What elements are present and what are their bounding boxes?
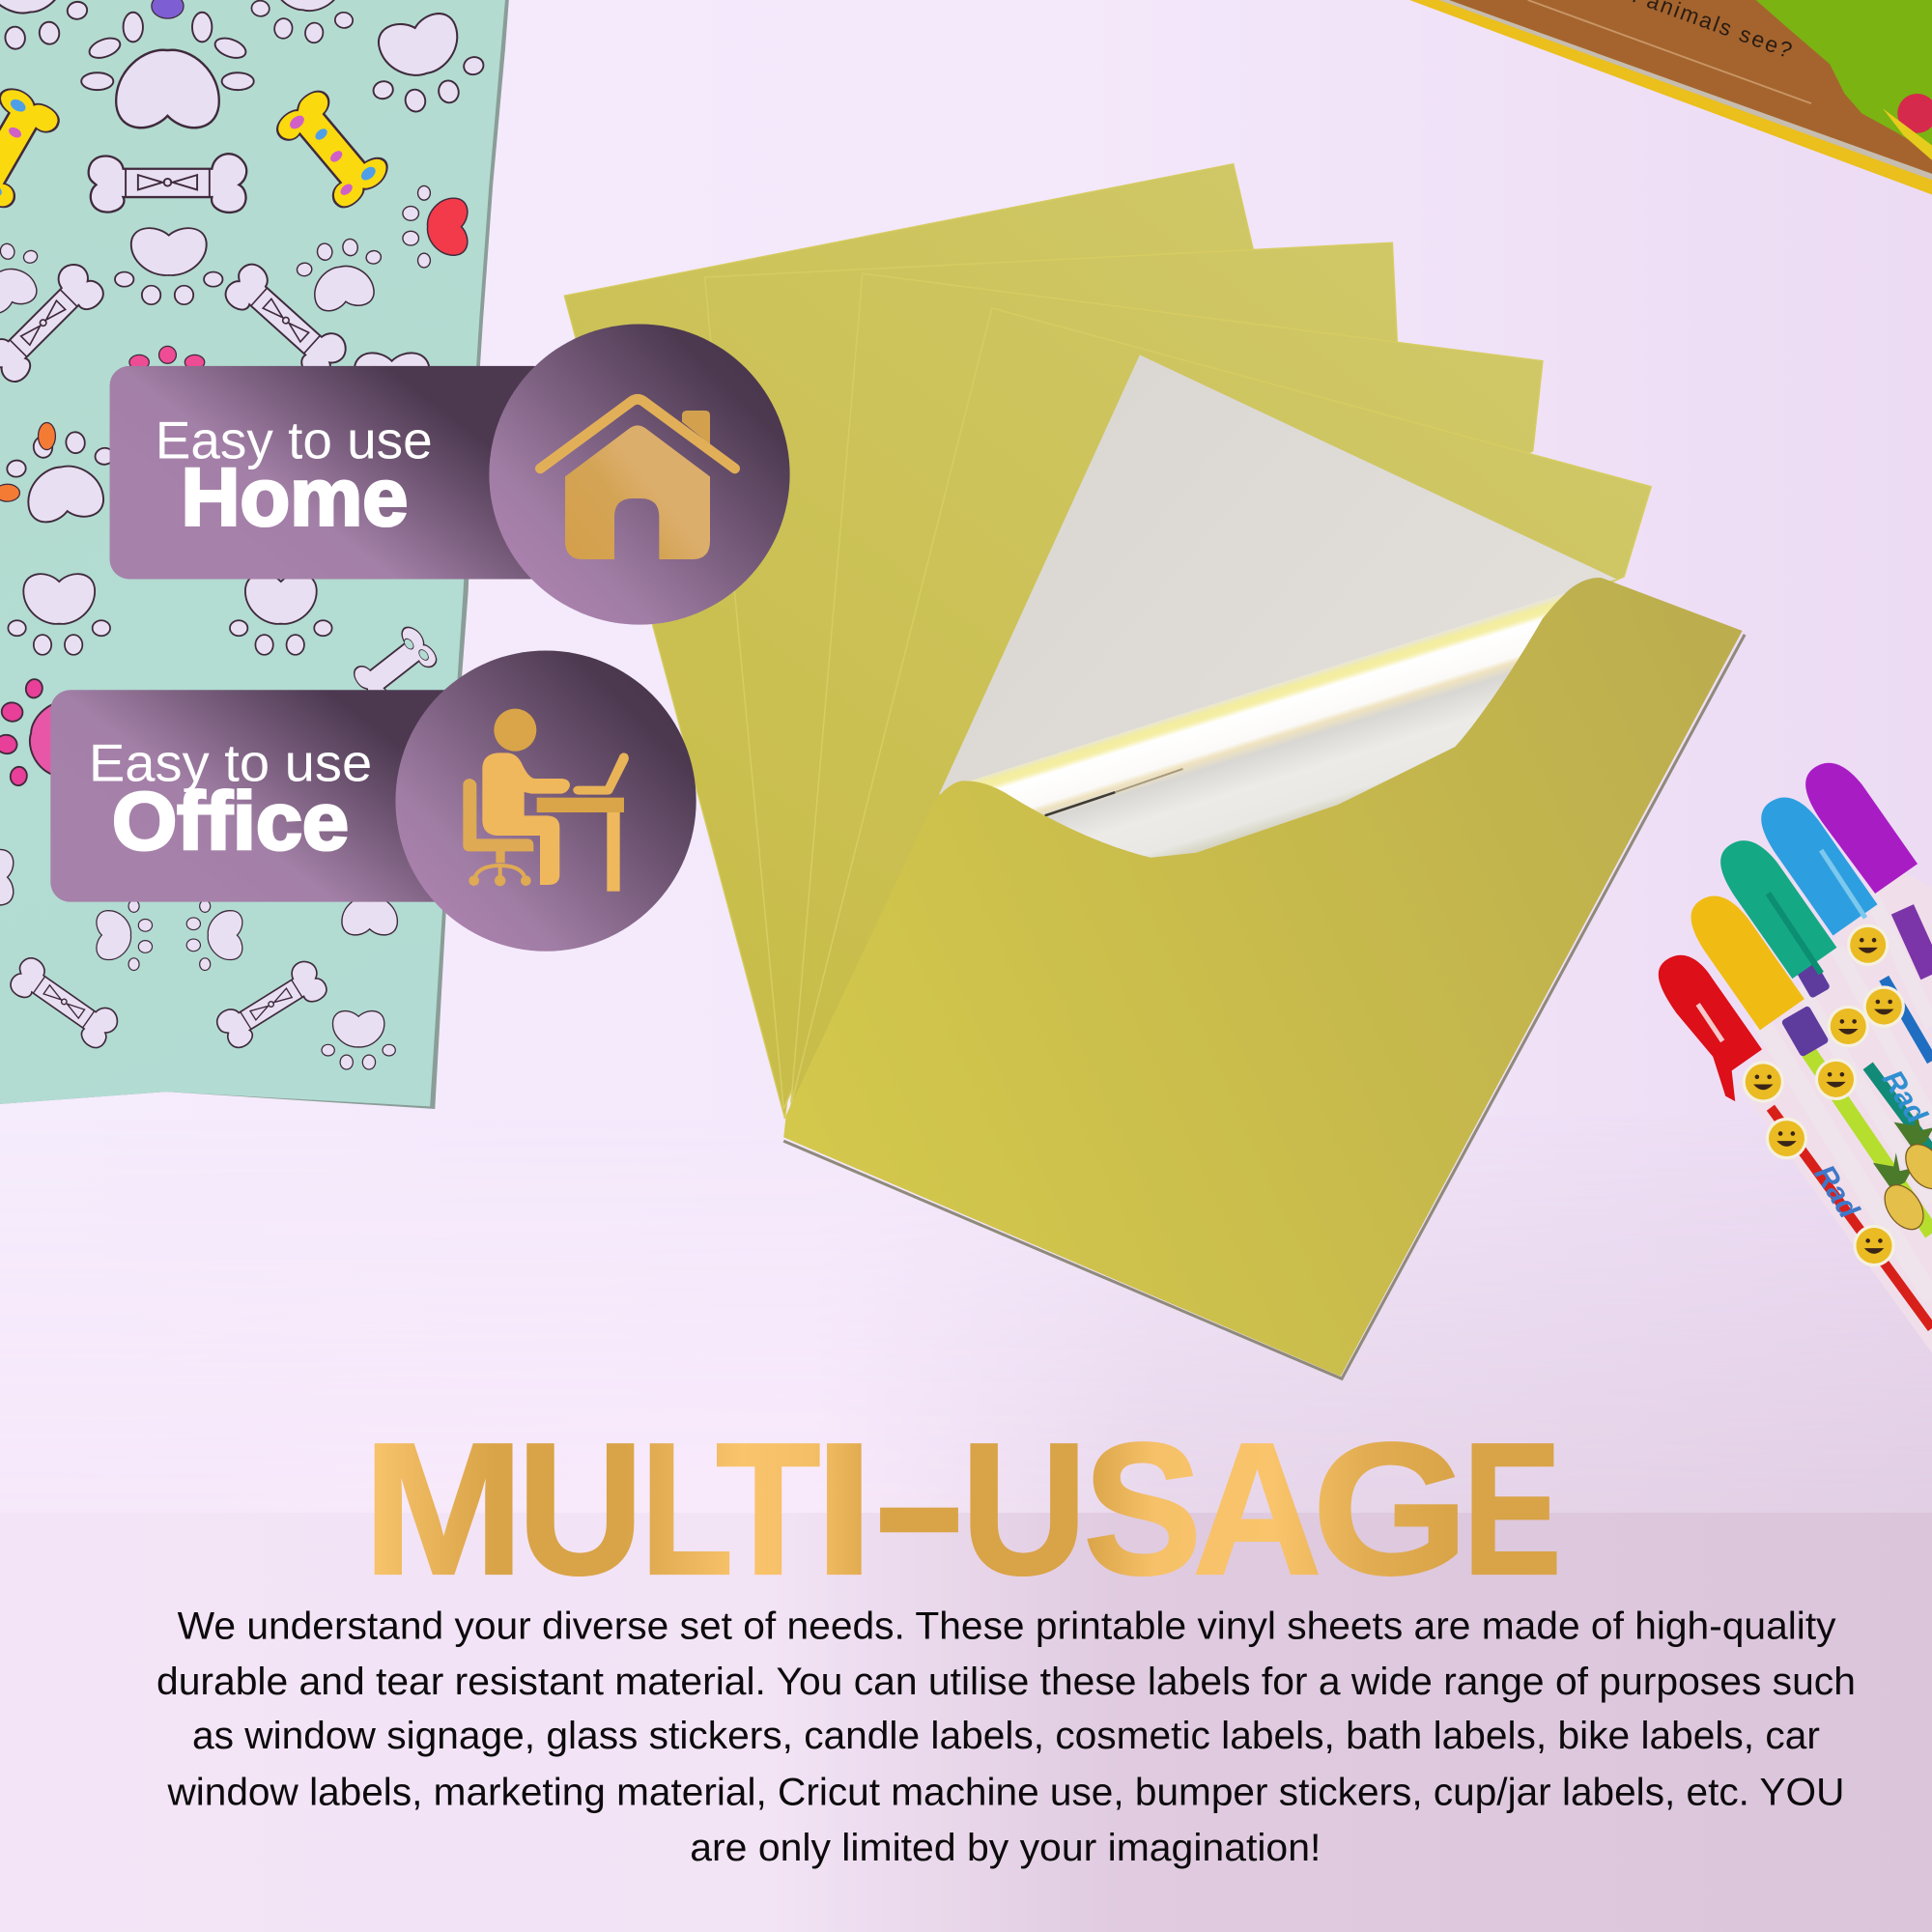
title: G xyxy=(1312,1405,1468,1614)
title: M xyxy=(363,1405,525,1614)
title: I xyxy=(813,1405,874,1614)
label: home: Home xyxy=(181,451,408,542)
ink stripes xyxy=(1771,909,1932,1328)
back sheets xyxy=(564,164,1651,1119)
top yellow sheet xyxy=(783,578,1743,1377)
label: easy to use: Easy to use xyxy=(156,410,433,469)
description paragraph: as window signage, glass stickers, candle labels, cosmetic labels, bath labels, bike labels, car xyxy=(192,1715,1820,1757)
badge panel xyxy=(110,366,554,579)
clear pen tubes xyxy=(1737,863,1932,1353)
description paragraph: durable and tear resistant material. You can utilise these labels for a wide range of purposes such xyxy=(156,1661,1856,1703)
icon: house xyxy=(540,399,735,559)
shadow edge xyxy=(783,635,1745,1378)
badge panel xyxy=(50,690,469,902)
title: S xyxy=(1084,1405,1202,1614)
title xyxy=(363,1400,1561,1614)
title: - xyxy=(870,1400,968,1609)
white pen barrels xyxy=(1761,894,1932,1298)
description paragraph: are only limited by your imagination! xyxy=(690,1827,1321,1869)
background surface xyxy=(790,48,1932,1932)
badge: easy to use home xyxy=(110,324,790,625)
peeled white backing xyxy=(939,355,1616,795)
pen caps xyxy=(1642,751,1918,1104)
gel pens xyxy=(1642,751,1932,1353)
icon: person at desk xyxy=(463,709,629,892)
title: E xyxy=(1463,1405,1561,1614)
title: U xyxy=(961,1405,1087,1614)
title: U xyxy=(518,1405,643,1614)
vinyl sheets fan xyxy=(564,164,1745,1378)
badge circle xyxy=(395,650,696,952)
title: T xyxy=(716,1405,820,1614)
glossy curl xyxy=(969,593,1566,858)
label: office: Office xyxy=(112,776,349,867)
description paragraph xyxy=(156,1605,1856,1869)
badge: easy to use office xyxy=(50,650,696,952)
badge circle xyxy=(489,324,790,625)
label: easy to use: Easy to use xyxy=(89,733,372,793)
description paragraph: We understand your diverse set of needs. These printable vinyl sheets are made of high-quality xyxy=(178,1605,1836,1647)
emoji and decorations xyxy=(1743,924,1932,1266)
title: L xyxy=(640,1405,733,1614)
title: A xyxy=(1193,1405,1321,1614)
emoji and decorations: Rad xyxy=(1876,1065,1932,1130)
emoji and decorations: Rad xyxy=(1808,1159,1866,1225)
paw and bone print xyxy=(0,0,491,1069)
picture book corner xyxy=(1409,0,1932,195)
patterned mint paper xyxy=(0,0,509,1109)
description paragraph: window labels, marketing material, Cricut machine use, bumper stickers, cup/jar labels, etc. YOU xyxy=(166,1772,1844,1814)
